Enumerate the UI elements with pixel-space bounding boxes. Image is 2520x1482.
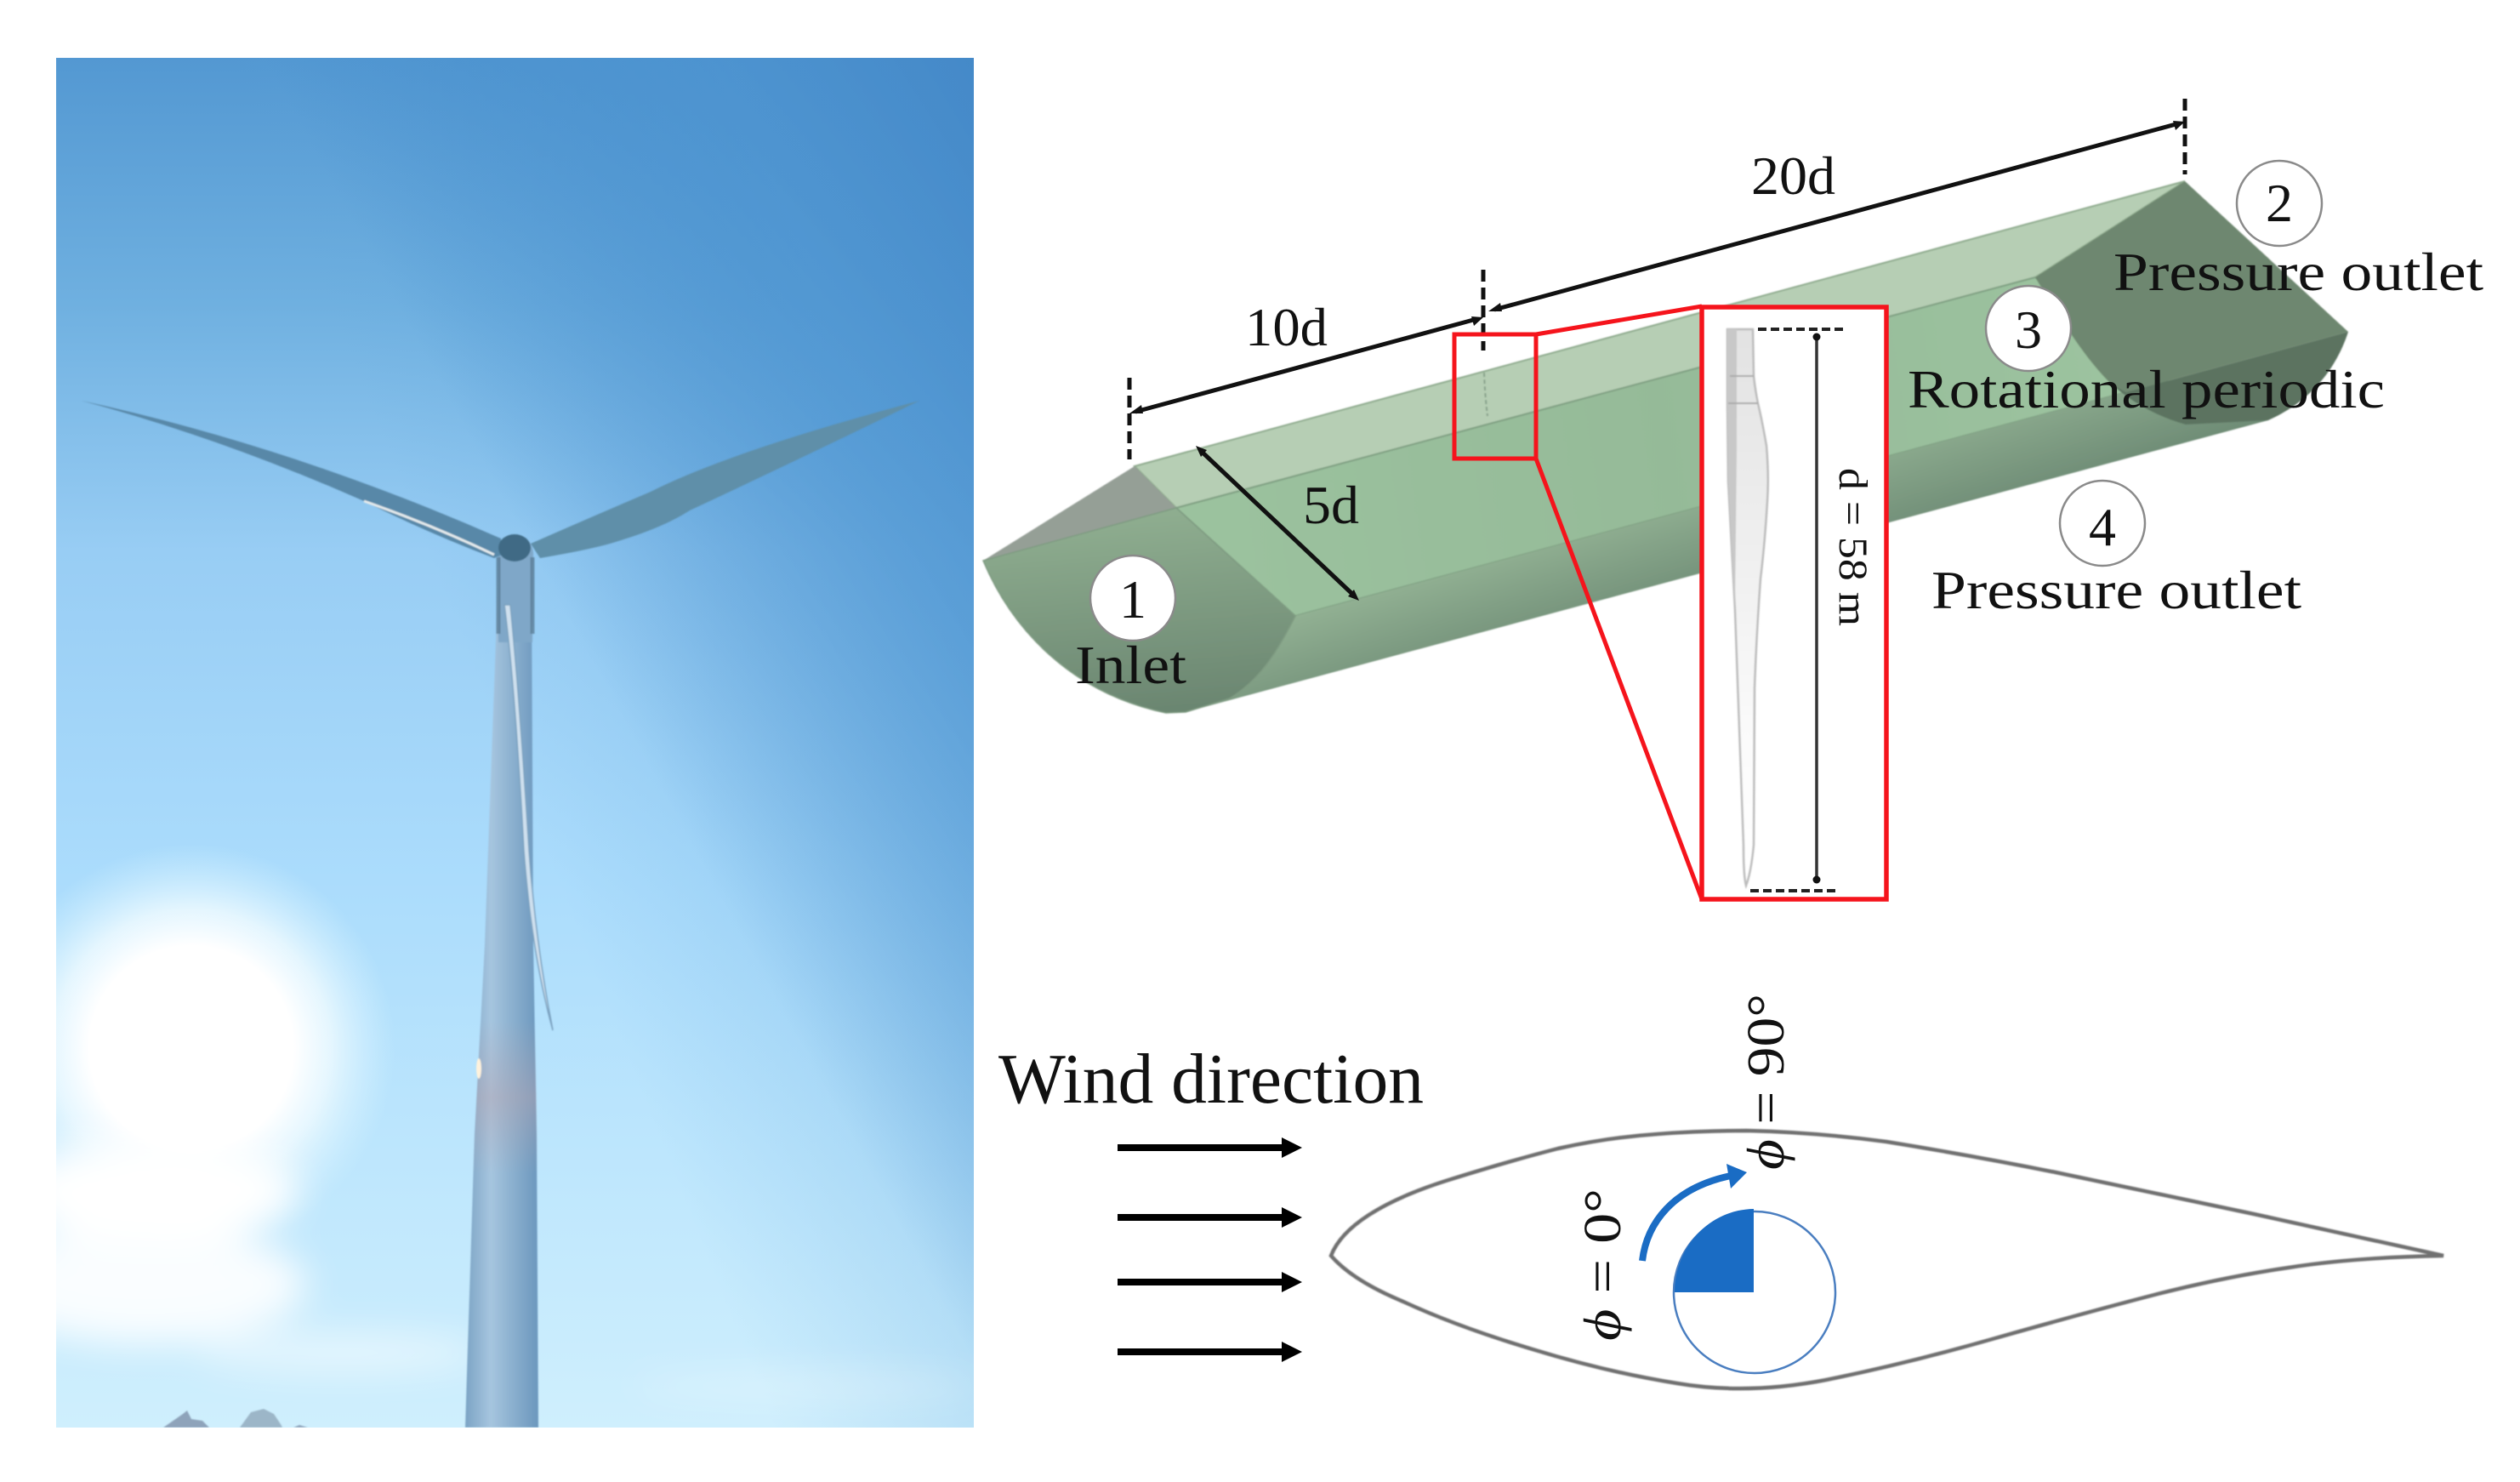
nacelle shading [498,557,532,634]
dashed marker middle [1482,270,1485,351]
heading: Wind direction: Wind direction [998,1040,1424,1119]
turbine [82,401,919,1428]
airfoil profile [1331,1131,2443,1388]
boundary marker 3: 3 [2015,299,2042,360]
arrow 1 [1118,1137,1302,1158]
boundary marker 2: 2 [2266,173,2293,233]
panel: airfoil section [1331,994,2443,1388]
boundary marker 2 [2237,161,2322,246]
20d line [1488,121,2185,311]
boundary label: Pressure outlet (bottom): Pressure outlet [1931,560,2301,620]
dimension label: 20d: 20d [1751,145,1835,206]
right blade [531,401,919,558]
blade outline [1727,329,1768,886]
callout: red connector lines [1536,306,1702,899]
angle label 0 degrees: ϕ = 0° [1574,1188,1632,1341]
arrow 2 [1118,1207,1302,1228]
inlet face [983,508,1295,713]
rotation arrow [1642,1164,1747,1261]
angle label 90 degrees: ϕ = 90° [1738,994,1795,1170]
10d line [1129,316,1483,413]
tower [465,596,538,1428]
dimension: 10d and 20d lines [1129,99,2185,601]
5d line [1196,446,1359,601]
shaded quarter [1675,1209,1754,1292]
side face: rotational periodic [1176,277,2167,616]
panel: computational domain [983,181,2348,713]
nacelle [498,534,533,642]
panel: wind turbine photograph [0,58,987,1428]
rear blade [504,605,553,1030]
blade marker in domain [1484,373,1488,416]
boundary label: Rotational periodic: Rotational periodic [1908,359,2385,419]
inlet roof triangle [983,466,1176,561]
blade length label: d = 58 m [1830,468,1875,626]
flare highlight [476,1058,481,1079]
boundary marker 4 [2060,481,2145,566]
boundary label: Pressure outlet (top): Pressure outlet [2113,242,2483,302]
boundary marker 3 [1986,286,2071,371]
dashed marker right [2182,99,2187,174]
wind arrows [1118,1137,1302,1362]
lower face [1186,381,2268,712]
blade length dimension [1750,329,1847,891]
rotation circle [1674,1211,1835,1373]
top face [1135,181,2185,508]
dashed marker left [1128,378,1131,459]
boundary marker 1 [1090,556,1175,641]
arrow 4 [1118,1342,1302,1362]
sky background [56,58,974,1428]
boundary marker 1: 1 [1119,569,1146,630]
trees [163,1409,308,1428]
outlet lower face [2111,332,2348,425]
dimension label: 5d: 5d [1303,475,1359,535]
sun and clouds [56,857,919,1395]
inset frame [1702,307,1886,899]
outlet upper face [2035,181,2348,392]
boundary marker 4: 4 [2089,497,2116,557]
boundary label: Inlet: Inlet [1075,635,1186,695]
hub [498,534,531,561]
callout: red zoom box on blade location [1454,334,1536,459]
panel: blade zoom inset [1702,307,1886,899]
left blade [82,401,502,558]
arrow 3 [1118,1272,1302,1292]
dimension label: 10d: 10d [1245,297,1328,357]
lens flare on tower [475,1039,538,1156]
